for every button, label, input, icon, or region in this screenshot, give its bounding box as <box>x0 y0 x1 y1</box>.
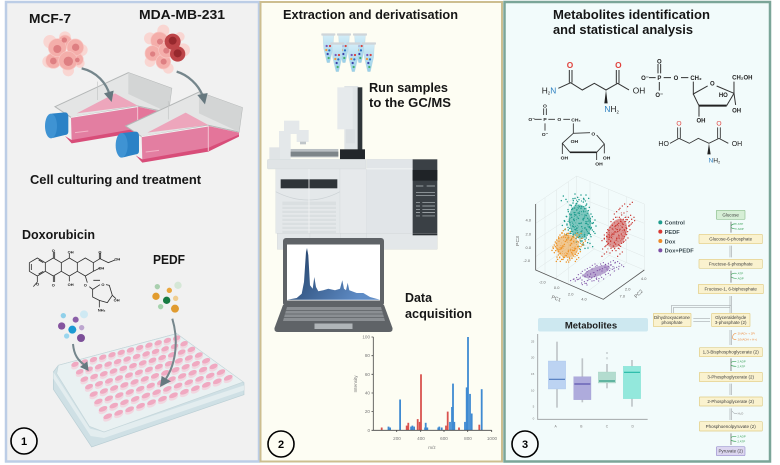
icon: culture flask 1 <box>45 73 172 143</box>
heading: metabolites identification and statistical analysis: Metabolites identification <box>553 7 710 22</box>
chart: 3D PCA scatter: 0.0 <box>554 285 560 290</box>
chart: mass spectrum: 80 <box>365 353 370 358</box>
legend: PCA groups: PEDF <box>665 230 680 236</box>
chemical structure: glucose phosphate: OH <box>571 139 578 145</box>
chart: 3D PCA scatter: 4.0 <box>641 276 647 281</box>
chart: mass spectrum: Intensity <box>353 375 358 393</box>
text: data acquisition: acquisition <box>405 306 472 321</box>
badge: step 2: 2 <box>278 439 284 451</box>
chemical structure: fructose phosphate: O⁻ <box>655 93 663 99</box>
chemical structure: doxorubicin: OH <box>98 265 104 270</box>
icon: MCF-7 cell cluster <box>42 31 88 76</box>
chart: 3D PCA scatter: 4.0 <box>526 218 532 223</box>
diagram: glycolysis pathway upper: 3-phosphate (2) <box>715 320 747 325</box>
panel: metabolite identification and statistics <box>504 2 770 462</box>
chemical structure: doxorubicin: O <box>84 283 87 288</box>
chemical structure: glucose phosphate: O <box>557 117 561 123</box>
chart: mass spectrum: 600 <box>440 436 448 441</box>
badge: step 2 <box>268 431 294 457</box>
chart: metabolite box plot: 5 <box>533 404 535 408</box>
chart: metabolite box plot: 25 <box>531 340 535 344</box>
diagram: glycolysis pathway upper: phosphate <box>662 320 683 325</box>
chemical structure: fructose phosphate: O <box>710 81 715 87</box>
diagram: glycolysis pathway lower <box>699 330 762 456</box>
diagram: glycolysis pathway upper: ATP <box>738 271 743 275</box>
chart: 3D PCA scatter: 2.0 <box>526 232 532 237</box>
text: cell culturing and treatment: Cell culturing and treatment <box>30 172 202 187</box>
chart: mass spectrum <box>353 334 498 450</box>
heading: metabolites identification and statistical analysis: and statistical analysis <box>553 22 693 37</box>
chemical structure: glutamine: H <box>542 85 548 95</box>
diagram: glycolysis pathway lower: Phosphoenolpyruvate (2) <box>706 424 756 429</box>
chemical structure: glutamate: O <box>716 120 722 127</box>
chart: 3D PCA scatter: PC1 <box>550 295 562 304</box>
chemical structure: glucose phosphate: OH <box>603 155 611 161</box>
chemical structure: doxorubicin: OH <box>68 250 74 255</box>
icon: MDA-MB-231 cell cluster <box>144 25 190 74</box>
arrow: cells into flask 2 <box>177 72 208 104</box>
chemical structure: doxorubicin: O <box>52 282 55 287</box>
badge: step 1: 1 <box>21 436 27 448</box>
text: run samples to the GC/MS: Run samples <box>369 80 448 95</box>
icon: laptop with chromatogram <box>274 238 393 332</box>
chart: 3D PCA scatter: PC3 <box>515 236 521 246</box>
heading: MCF-7: MCF-7 <box>29 11 71 26</box>
chemical structure: doxorubicin: OH <box>68 282 74 287</box>
chemical structure: glutamate: HO <box>658 141 669 148</box>
diagram: glycolysis pathway upper: Glucose <box>722 212 739 217</box>
chemical structure: glutamate: O <box>676 120 682 127</box>
chemical structure: glucose phosphate: OH <box>595 162 603 168</box>
diagram: glycolysis pathway lower: 2 ADP <box>737 435 746 439</box>
panel: cell culturing and treatment <box>6 2 259 462</box>
diagram: glycolysis pathway upper: Dihydroxyacetone <box>654 315 690 320</box>
chemical structure: fructose phosphate: HO <box>719 93 728 99</box>
diagram: glycolysis pathway lower: 2(NADH + H+) <box>738 338 757 342</box>
chemical structure: fructose phosphate: O <box>657 59 662 65</box>
chart: 3D PCA scatter: -2.0 <box>539 280 547 285</box>
chemical structure: fructose phosphate: OH <box>696 119 705 125</box>
legend: PCA groups: Control <box>665 221 685 227</box>
chart: metabolite box plot: 15 <box>531 372 535 376</box>
chemical structure: glucose phosphate: OH <box>561 155 568 161</box>
diagram: glycolysis pathway lower: 2 ADP <box>737 360 746 364</box>
chart: mass spectrum: 20 <box>365 409 370 414</box>
chart: metabolite box plot: 10 <box>531 388 535 392</box>
chart: 3D PCA scatter: 2.0 <box>568 291 574 296</box>
chart: metabolite box plot: 0 <box>533 417 535 421</box>
badge: step 1 <box>11 428 37 454</box>
heading: Metabolites <box>538 318 648 332</box>
chart: 3D PCA scatter: 2.0 <box>625 287 631 292</box>
chemical structure: fructose phosphate: P <box>657 76 661 82</box>
badge: step 3: 3 <box>522 439 528 451</box>
chemical structure: glutamine: O <box>567 60 574 70</box>
chart: mass spectrum: m/z <box>428 445 436 450</box>
chemical structure: glutamine: 2 <box>548 91 551 96</box>
badge: step 3 <box>512 431 538 457</box>
chemical structure: doxorubicin: O <box>52 248 55 253</box>
chemical structure: doxorubicin: OH <box>114 298 120 303</box>
chart: mass spectrum: 0 <box>367 428 370 433</box>
diagram: glycolysis pathway lower: 2 ATP <box>737 364 745 368</box>
heading: Metabolites: Metabolites <box>565 320 617 332</box>
chart: mass spectrum: 40 <box>365 390 370 396</box>
heading: metabolites identification and statistical analysis <box>553 7 710 37</box>
diagram: glycolysis pathway lower: 3-Phosphoglycerate (2) <box>707 375 754 380</box>
icon: sample tubes <box>321 33 376 72</box>
chemical structure: fructose phosphate: O⁻ <box>641 76 649 82</box>
chart: mass spectrum: 100 <box>362 334 370 340</box>
chemical structure: glucose phosphate: P <box>543 117 547 123</box>
chart: mass spectrum: 800 <box>464 436 472 441</box>
text: PEDF: PEDF <box>153 252 185 267</box>
chemical structure: glucose phosphate: CH₃ <box>571 117 581 123</box>
chart: metabolite box plot <box>531 334 648 429</box>
chemical structure: fructose phosphate <box>641 59 752 125</box>
chemical structure: fructose phosphate: CH₂ <box>690 76 702 82</box>
chart: mass spectrum: 60 <box>365 372 370 377</box>
heading: MDA-MB-231: MDA-MB-231 <box>139 7 225 22</box>
chart: mass spectrum: 200 <box>393 436 401 441</box>
chemical structure: glutamate: OH <box>732 141 742 148</box>
diagram: glycolysis pathway lower: 2-Phosphoglycerate (2) <box>707 399 754 404</box>
diagram: glycolysis pathway lower: 1,3-Bisphosphoglycerate (2) <box>703 350 759 355</box>
chemical structure: glucose phosphate: O⁻ <box>542 132 549 138</box>
text: data acquisition <box>405 290 472 321</box>
arrow: PEDF to plate <box>160 319 176 387</box>
diagram: glycolysis pathway upper: Fructose-6-phosphate <box>709 261 753 266</box>
chemical structure: doxorubicin: O <box>36 281 39 286</box>
text: data acquisition: Data <box>405 290 433 305</box>
chemical structure: glucose phosphate: O <box>543 103 547 109</box>
arrow: cells into flask 1 <box>82 68 114 102</box>
chart: mass spectrum: 1000 <box>487 436 498 441</box>
diagram: glycolysis pathway lower: H₂O <box>738 412 744 416</box>
text: run samples to the GC/MS <box>369 80 451 110</box>
chemical structure: glucose phosphate: O <box>591 131 595 137</box>
chart: metabolite box plot: C <box>606 425 609 429</box>
text: Doxorubicin: Doxorubicin <box>22 227 95 242</box>
diagram: glycolysis pathway lower: 2 ATP <box>737 439 745 443</box>
chart: metabolite box plot: D <box>631 425 634 429</box>
diagram: glycolysis pathway upper: Glucose-6-phosphate <box>709 237 753 242</box>
chemical structure: glutamine: OH <box>633 85 645 95</box>
chart: metabolite box plot: 20 <box>531 356 535 360</box>
diagram: glycolysis pathway lower: 2NAD+ + 2Pi <box>738 331 755 335</box>
chart: mass spectrum: 400 <box>417 436 425 441</box>
icon: 96-well plate <box>53 334 244 447</box>
icon: PEDF molecules <box>152 282 182 313</box>
diagram: glycolysis pathway upper: Fructose-1, 6-biphosphate <box>704 287 757 292</box>
legend: PCA groups: Dox+PEDF <box>665 249 694 255</box>
chemical structure: glutamate <box>658 120 742 164</box>
chemical structure: glucose phosphate <box>528 103 611 168</box>
diagram: glycolysis pathway upper <box>653 210 763 327</box>
chart: 3D PCA scatter: 7.0 <box>620 294 626 299</box>
text: run samples to the GC/MS: to the GC/MS <box>369 95 451 110</box>
chemical structure: glutamine: O <box>615 60 622 70</box>
diagram: glycolysis pathway upper: ADP <box>738 276 744 280</box>
chemical structure: fructose phosphate: O <box>674 76 679 82</box>
legend: PCA groups <box>658 220 694 255</box>
chart: metabolite box plot: A <box>555 425 558 429</box>
icon: doxorubicin molecules <box>58 310 88 342</box>
chart: 3D PCA scatter: 4.0 <box>581 296 588 301</box>
icon: GC/MS instrument <box>267 86 437 249</box>
chemical structure: doxorubicin: O <box>98 249 102 254</box>
chemical structure: glutamate: 2 <box>718 160 720 164</box>
chemical structure: glutamine: NH <box>604 104 616 114</box>
chemical structure: glutamate: NH <box>708 157 718 164</box>
diagram: glycolysis pathway lower: Pyruvate (2) <box>718 449 743 454</box>
chemical structure: doxorubicin: NH₂ <box>98 307 106 312</box>
chemical structure: fructose phosphate: CH₂OH <box>732 75 752 81</box>
diagram: glycolysis pathway upper: ADP <box>738 227 744 231</box>
icon: culture flask 2 <box>116 92 242 163</box>
chart: 3D PCA scatter: -2.0 <box>523 258 531 263</box>
chemical structure: fructose phosphate: OH <box>732 108 741 114</box>
diagram: glycolysis pathway upper: Glyceraldehyde <box>715 315 747 320</box>
chemical structure: glutamine: 2 <box>616 109 619 114</box>
heading: extraction and derivatisation: Extraction and derivatisation <box>283 7 458 22</box>
chart: metabolite box plot: B <box>580 425 583 429</box>
chemical structure: doxorubicin <box>29 248 120 312</box>
diagram: glycolysis pathway upper: ATP <box>738 222 743 226</box>
chart: 3D PCA scatter <box>515 176 647 304</box>
chart: 3D PCA scatter: 0.0 <box>526 245 532 250</box>
legend: PCA groups: Dox <box>665 239 676 245</box>
chemical structure: glutamine <box>542 60 645 114</box>
chemical structure: glucose phosphate: O⁻ <box>528 117 535 123</box>
chemical structure: doxorubicin: O <box>101 282 105 287</box>
chemical structure: glutamine: N <box>550 85 556 95</box>
chemical structure: doxorubicin: OH <box>114 257 120 262</box>
arrow: doxorubicin to plate <box>73 344 89 371</box>
panel: extraction and GC/MS <box>260 2 502 462</box>
chart: 3D PCA scatter: PC2 <box>633 289 645 300</box>
